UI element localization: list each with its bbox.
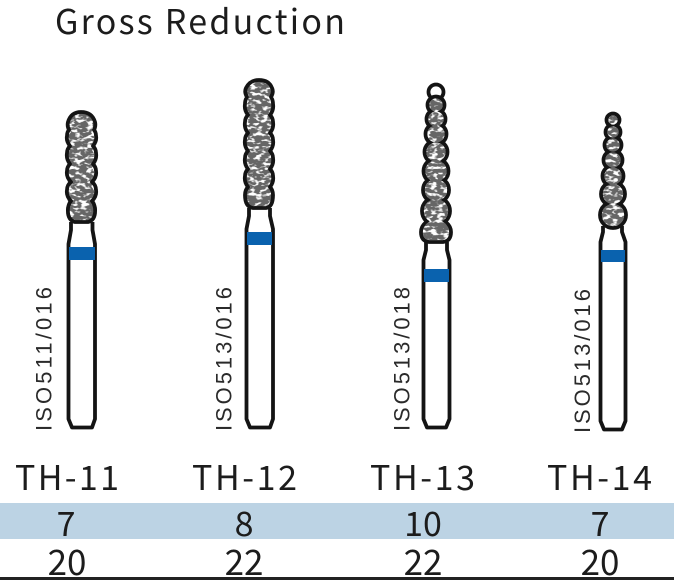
row: second values: 22 (404, 535, 442, 585)
row: second values: 22 (225, 535, 263, 585)
label: ISO511/016: ISO511/016 (32, 287, 56, 431)
table bottom rule (0, 577, 674, 580)
label: ISO513/018: ISO513/018 (390, 287, 414, 431)
row: first values: 10 (404, 497, 442, 546)
label: ISO513/016 (TH-12): ISO513/016 (212, 287, 236, 431)
model names: TH-12 (192, 451, 297, 500)
row: second values (48, 535, 619, 585)
row: second values: 20 (48, 535, 86, 585)
bur: TH-13 (418, 84, 454, 428)
bur: TH-12 (242, 78, 276, 430)
row: first values (57, 497, 609, 546)
model names: TH-11 (15, 451, 119, 500)
model names: TH-14 (547, 451, 652, 500)
row: first values: 7 (57, 497, 75, 546)
model names (15, 451, 652, 500)
model names: TH-13 (370, 451, 475, 500)
row: second values: 20 (581, 535, 619, 585)
label: ISO513/016 (TH-14): ISO513/016 (570, 289, 595, 433)
row: first values: 7 (591, 497, 609, 546)
bur: TH-14 (597, 112, 629, 430)
row: first values: 8 (235, 497, 253, 546)
bur: TH-11 (64, 110, 98, 430)
table row band (0, 503, 674, 539)
